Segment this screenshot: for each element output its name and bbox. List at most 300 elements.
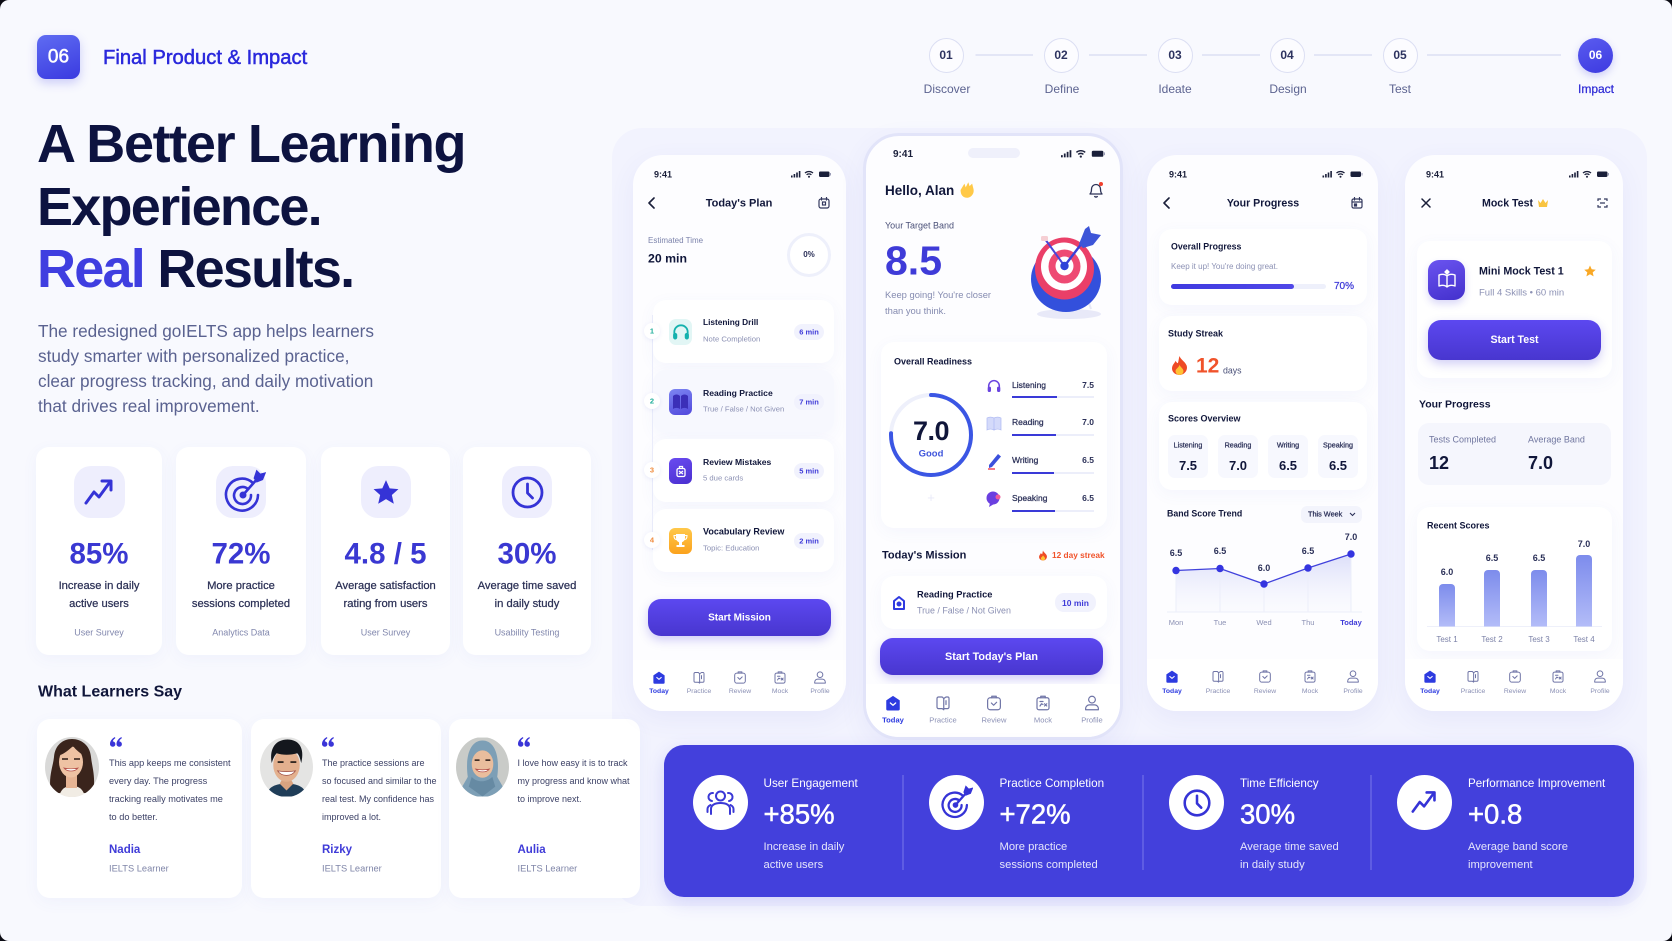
role: IELTS Learner (518, 863, 577, 873)
skill: Reading (986, 416, 1094, 436)
value: 4.8 / 5 (344, 537, 427, 570)
nav: Practice (1466, 669, 1480, 684)
score tile: Speaking (1318, 435, 1358, 478)
card title: Scores Overview (1168, 414, 1241, 424)
icon: notification bell (1089, 182, 1103, 198)
headline: A Better Learning (37, 114, 465, 174)
card subtitle: Keep it up! You're doing great. (1171, 262, 1278, 271)
step number: 4 (650, 536, 654, 544)
nav: Today (1422, 669, 1438, 684)
process stepper (924, 38, 1616, 96)
step 01: 01 (939, 48, 953, 62)
skill score: 6.5 (1082, 492, 1094, 502)
readiness rating: Good (919, 448, 943, 459)
icon: headphones (988, 380, 1000, 392)
heading: Today's Mission: Today's Mission (882, 549, 966, 561)
line chart: band score trend: 6.0 (1258, 563, 1270, 573)
button: Start Mission (648, 599, 831, 636)
step 01 (928, 38, 964, 72)
testimonial: Aulia (449, 719, 640, 898)
step 05: 05 (1393, 48, 1407, 62)
description: The redesigned goIELTS app helps learners (38, 321, 374, 341)
button: Start Test: Start Test (1490, 334, 1539, 346)
icon: book (986, 416, 1002, 430)
line chart: band score trend: Tue (1214, 618, 1226, 627)
skill: Writing (988, 454, 1094, 474)
metric title: Performance Improvement (1468, 777, 1605, 790)
quote text: The practice sessions are (322, 758, 425, 768)
encouragement: than you think. (885, 304, 946, 316)
icon: headphones (669, 319, 692, 345)
card title: Overall Progress (1171, 242, 1241, 252)
value: 72% (211, 537, 271, 570)
icon: mission (893, 596, 905, 610)
task title: Listening Drill (703, 317, 758, 327)
dropdown: This Week (1301, 506, 1362, 522)
avatar: Rizky (260, 738, 313, 796)
bar chart: recent scores: Test 1 (1436, 635, 1458, 644)
status icons (1322, 170, 1363, 178)
description: Increase in daily (59, 580, 139, 592)
card: Overall Readiness (881, 342, 1107, 528)
line chart: band score trend: 7.0 (1345, 532, 1357, 542)
quote text: my progress and know what (518, 776, 630, 786)
illustration: target with arrows (1031, 226, 1101, 319)
icon: book (669, 389, 692, 415)
nav: Today (653, 672, 665, 684)
skill score: 7.5 (1082, 379, 1094, 389)
icon: waving hand (960, 182, 974, 198)
stat value: 7.0 (1528, 453, 1553, 473)
quote text: to do better. (109, 812, 158, 822)
panel: phone showcase backdrop (612, 128, 1647, 906)
metric title: User Engagement (764, 777, 858, 790)
task 2: Reading Practice (653, 370, 834, 433)
card: mission (881, 576, 1107, 629)
estimated time value: 20 min (648, 252, 687, 266)
heading: Band Score Trend: Band Score Trend (1167, 509, 1242, 519)
step number (644, 323, 660, 339)
metric value: +85% (764, 798, 835, 830)
readiness ring (889, 393, 973, 477)
card title: Recent Scores (1427, 521, 1490, 531)
icon: flame (1170, 355, 1189, 376)
step 03: 03 (1168, 48, 1182, 62)
metric description (764, 838, 884, 874)
duration (794, 532, 824, 548)
task 4: Vocabulary Review (653, 509, 834, 572)
score tile: Listening: Listening (1174, 441, 1202, 450)
timeline connector (652, 315, 653, 550)
metric description: More practice (1000, 841, 1067, 853)
task subtitle: True / False / Not Given (703, 404, 784, 413)
dropdown: This Week: This Week (1308, 509, 1342, 518)
metric value: 30% (1240, 798, 1295, 830)
estimated time label: Estimated Time (648, 236, 703, 245)
role: IELTS Learner (109, 863, 169, 873)
task title: Vocabulary Review (703, 526, 784, 536)
screen title: Today's Plan (706, 197, 772, 209)
line chart: band score trend: Thu (1302, 618, 1314, 627)
nav: Today (1164, 669, 1180, 684)
score tile: Speaking: Speaking (1323, 441, 1353, 450)
line chart: band score trend: Mon (1169, 618, 1183, 627)
icon: back (1162, 197, 1172, 209)
status time: 9:41 (654, 169, 672, 179)
card: Recent Scores (1417, 507, 1612, 651)
score tile: Reading: 7.0 (1229, 458, 1247, 473)
nav: Review (734, 671, 746, 684)
icon: review (669, 458, 692, 484)
section badge: 06 (37, 35, 80, 79)
icon: close (1421, 198, 1431, 208)
duration: 6 min (799, 327, 819, 336)
status icons (1061, 150, 1105, 158)
icon: star (360, 466, 410, 518)
nav label: Mock: Mock (1034, 715, 1052, 724)
heading: Your Progress: Your Progress (1419, 399, 1491, 411)
icon: quote (518, 737, 530, 747)
nav label: Review: Review (729, 688, 751, 695)
streak count: 12 (1196, 354, 1219, 377)
nav: Mock (774, 671, 786, 684)
icon: flame (1039, 550, 1047, 560)
description (59, 580, 140, 610)
nav label: Profile: Profile (1590, 688, 1610, 695)
nav: Profile (1592, 669, 1608, 684)
name: Nadia (109, 844, 140, 856)
bar chart: recent scores (1417, 507, 1612, 651)
section badge: 06: 06 (48, 47, 69, 68)
score tile: Writing: Writing (1277, 441, 1299, 450)
metric description: improvement (1468, 859, 1533, 871)
nav: Practice (694, 672, 704, 684)
metric title: Time Efficiency (1240, 777, 1319, 790)
bar chart: recent scores: Test 3 (1528, 635, 1550, 644)
metric description: active users (764, 859, 823, 871)
score tile: Listening: 7.5 (1179, 458, 1197, 473)
role: IELTS Learner (322, 863, 382, 873)
status time: 9:41 (893, 148, 913, 160)
nav label: Today: Today (649, 688, 669, 695)
step 06 active: 06 (1589, 48, 1602, 62)
heading: What Learners Say: What Learners Say (38, 683, 182, 700)
mission subtitle: True / False / Not Given (917, 605, 1011, 615)
description: Average time saved (478, 580, 576, 592)
skill name: Listening (1012, 379, 1046, 389)
description (192, 580, 290, 610)
duration (1055, 593, 1096, 612)
nav label: Practice: Practice (1206, 688, 1230, 695)
step number: 2 (650, 396, 654, 406)
icon: calendar (1351, 197, 1363, 209)
impact banner (664, 745, 1634, 897)
progress value: 70% (1334, 280, 1354, 292)
name: Rizky (322, 844, 352, 856)
screen title: Your Progress (1227, 198, 1299, 210)
duration: 2 min (799, 536, 819, 545)
description: Average satisfaction (335, 580, 436, 592)
headline: Real Results. (37, 239, 353, 299)
skill: Listening (988, 379, 1094, 398)
stat card: 30% (463, 447, 591, 655)
bar chart: recent scores: Test 4 (1573, 635, 1595, 644)
card title: Overall Readiness (894, 356, 972, 366)
step number (644, 532, 660, 548)
phone: Your Progress (1147, 155, 1378, 711)
nav label: Today: Today (882, 715, 904, 724)
quote text: every day. The progress (109, 776, 207, 786)
headline (37, 114, 465, 299)
section title: Final Product & Impact (103, 47, 307, 69)
stat label: Average Band (1528, 435, 1585, 445)
streak label: 12 day streak (1052, 550, 1105, 560)
stat label: Tests Completed (1429, 435, 1496, 445)
metric description: in daily study (1240, 859, 1305, 871)
metric description: Average time saved (1240, 841, 1339, 853)
metric: Time Efficiency (1169, 773, 1364, 873)
duration: 5 min (799, 466, 819, 475)
nav label: Mock: Mock (772, 688, 788, 695)
icon: trophy (669, 528, 692, 554)
line chart: band score trend: 6.5 (1302, 546, 1314, 556)
task title: Reading Practice (703, 387, 773, 397)
source: Analytics Data (212, 628, 270, 638)
description: that drives real improvement. (38, 396, 260, 416)
quote text (322, 758, 437, 822)
step 05 label: Test (1389, 82, 1411, 96)
step 06 label: Impact (1578, 82, 1614, 96)
nav: Review (1508, 669, 1522, 684)
skill: Speaking (986, 492, 1094, 512)
nav: Profile (1346, 669, 1360, 684)
progress ring: 0% (787, 233, 831, 277)
source: User Survey (361, 628, 410, 638)
phone: Mock Test (1405, 155, 1623, 711)
screen title: Mock Test (1482, 198, 1533, 210)
nav label: Practice: Practice (687, 688, 711, 695)
name: Aulia (518, 844, 546, 856)
bottom navigation (633, 660, 846, 711)
task subtitle: Note Completion (703, 334, 760, 343)
duration (794, 394, 824, 410)
source: User Survey (74, 628, 124, 638)
step 06 active (1578, 38, 1613, 72)
button: Start Test (1428, 320, 1601, 360)
bottom navigation (1147, 659, 1378, 711)
icon: trending up (74, 466, 124, 518)
icon: clock (502, 466, 552, 518)
quote text: tracking really motivates me (109, 794, 223, 804)
description (38, 321, 374, 416)
greeting: Hello, Alan (885, 183, 954, 198)
nav: Practice (1210, 669, 1226, 684)
quote text: real test. My confidence has (322, 794, 434, 804)
source: Usability Testing (495, 628, 559, 638)
step number: 1 (650, 326, 654, 336)
step 03 (1158, 38, 1192, 72)
nav label: Today: Today (1420, 688, 1440, 695)
step 03 label: Ideate (1158, 82, 1192, 96)
description: in daily study (495, 598, 559, 610)
step number: 3 (650, 466, 654, 474)
metric: Performance Improvement (1397, 773, 1622, 873)
stat card: 4.8 / 5 (321, 447, 450, 655)
nav label: Review: Review (1254, 688, 1276, 695)
metric description: Average band score (1468, 841, 1568, 853)
card title: Study Streak (1168, 329, 1223, 339)
bar chart: recent scores: 6.0 (1441, 567, 1453, 577)
skill name: Writing (1012, 454, 1038, 464)
icon: speech bubbles (986, 492, 1000, 507)
skill bar (1012, 434, 1094, 436)
step number (644, 462, 660, 478)
metric description: Increase in daily (764, 841, 844, 853)
bottom navigation (866, 684, 1120, 740)
description: clear progress tracking, and daily motivation (38, 371, 373, 391)
description: active users (69, 598, 129, 610)
skill score: 6.5 (1082, 454, 1094, 464)
status time: 9:41 (1169, 169, 1187, 179)
step number (644, 393, 660, 409)
skill name: Speaking (1012, 492, 1047, 502)
progress ring: 0%: 0% (803, 250, 815, 259)
test details: Full 4 Skills • 60 min (1479, 287, 1564, 298)
description: rating from users (344, 598, 427, 610)
duration (794, 324, 824, 340)
metric: Practice Completion (929, 773, 1134, 873)
quote text (109, 758, 231, 822)
testimonial: Rizky (251, 719, 441, 898)
card: Overall Progress (1159, 229, 1367, 305)
score tile: Writing: 6.5 (1279, 458, 1297, 473)
step 04 (1270, 38, 1304, 72)
icon: trending up (1397, 775, 1452, 830)
notch (968, 148, 1020, 158)
button: Start Today's Plan: Start Today's Plan (945, 650, 1038, 662)
target band value: 8.5 (885, 237, 942, 283)
description (478, 580, 576, 610)
nav: Mock (1034, 694, 1052, 712)
step 02 label: Define (1045, 82, 1079, 96)
button: Start Mission: Start Mission (708, 612, 771, 623)
progress bar (1171, 284, 1326, 288)
icon: pen (988, 454, 1001, 470)
icon: scan (1596, 198, 1608, 208)
task 1: Listening Drill (653, 300, 834, 363)
card: Study Streak (1159, 316, 1367, 391)
avatar: Aulia (456, 738, 509, 796)
task subtitle: Topic: Education (703, 543, 759, 552)
value: 30% (497, 537, 557, 570)
skill bar (1012, 396, 1094, 398)
card: Scores Overview (1159, 402, 1367, 490)
stats tile (1418, 423, 1611, 485)
metric title: Practice Completion (1000, 777, 1104, 790)
task subtitle: 5 due cards (703, 473, 743, 482)
score tile: Writing (1268, 435, 1308, 478)
skill bar (1012, 510, 1094, 512)
nav: Review (1258, 669, 1272, 684)
card: Mini Mock Test (1417, 241, 1612, 378)
nav label: Review: Review (982, 715, 1006, 724)
status icons (1569, 170, 1609, 178)
nav: Mock (1550, 669, 1566, 684)
testimonial: Nadia (36, 719, 242, 898)
nav label: Practice: Practice (929, 715, 957, 724)
metric description: sessions completed (1000, 859, 1098, 871)
nav: Practice (934, 694, 952, 712)
quote text: I love how easy it is to track (518, 758, 628, 768)
avatar: Nadia (45, 737, 99, 797)
line chart: band score trend: 6.5 (1214, 546, 1226, 556)
bar chart: recent scores: 6.5 (1533, 553, 1545, 563)
description (335, 580, 436, 610)
bar chart: recent scores: Test 2 (1481, 635, 1503, 644)
quote text: to improve next. (518, 794, 582, 804)
stat card: 85% (36, 447, 162, 655)
nav: Profile (1083, 694, 1101, 712)
icon: quote (110, 737, 122, 747)
icon: calendar scan (818, 197, 830, 209)
nav: Profile (814, 671, 826, 684)
metric description (1240, 838, 1360, 874)
nav label: Practice: Practice (1461, 688, 1485, 695)
skill score: 7.0 (1082, 416, 1094, 426)
metric description (1468, 838, 1598, 874)
headline: Experience. (37, 176, 321, 236)
icon: target (216, 466, 266, 518)
description: More practice (207, 580, 275, 592)
icon: quote (322, 737, 334, 747)
nav label: Profile: Profile (1081, 715, 1103, 724)
readiness value: 7.0 (913, 415, 949, 445)
icon: users (693, 775, 748, 830)
target band label: Your Target Band (885, 221, 954, 231)
nav label: Profile: Profile (1343, 688, 1363, 695)
line chart: band score trend: Wed (1256, 618, 1272, 627)
nav: Mock (1302, 669, 1318, 684)
nav: Review (985, 694, 1003, 712)
score tile: Speaking: 6.5 (1329, 458, 1347, 473)
quote text: so focused and similar to the (322, 776, 437, 786)
nav label: Mock: Mock (1302, 688, 1318, 695)
phone: Home (center) (863, 133, 1123, 740)
step 02 (1044, 38, 1078, 72)
quote text (518, 758, 630, 804)
duration: 10 min (1062, 598, 1089, 608)
metric: User Engagement (693, 773, 893, 873)
encouragement: Keep going! You're closer (885, 289, 991, 300)
icon: target (929, 775, 984, 830)
description: sessions completed (192, 598, 290, 610)
icon: open book (1428, 260, 1465, 300)
plus glyph: + (927, 490, 935, 505)
line chart: band score trend: 6.5 (1170, 548, 1182, 558)
phone: Today's Plan (633, 155, 846, 711)
value: 85% (69, 537, 129, 570)
quote text: This app keeps me consistent (109, 758, 231, 768)
bar chart: recent scores: 6.5 (1486, 553, 1498, 563)
score tile: Listening (1168, 435, 1208, 478)
step 02: 02 (1054, 48, 1068, 62)
step 04: 04 (1280, 48, 1294, 62)
quote text: improved a lot. (322, 812, 381, 822)
status time: 9:41 (1426, 169, 1444, 179)
duration (794, 462, 824, 478)
skill bar (1012, 472, 1094, 474)
nav label: Profile: Profile (810, 688, 830, 695)
